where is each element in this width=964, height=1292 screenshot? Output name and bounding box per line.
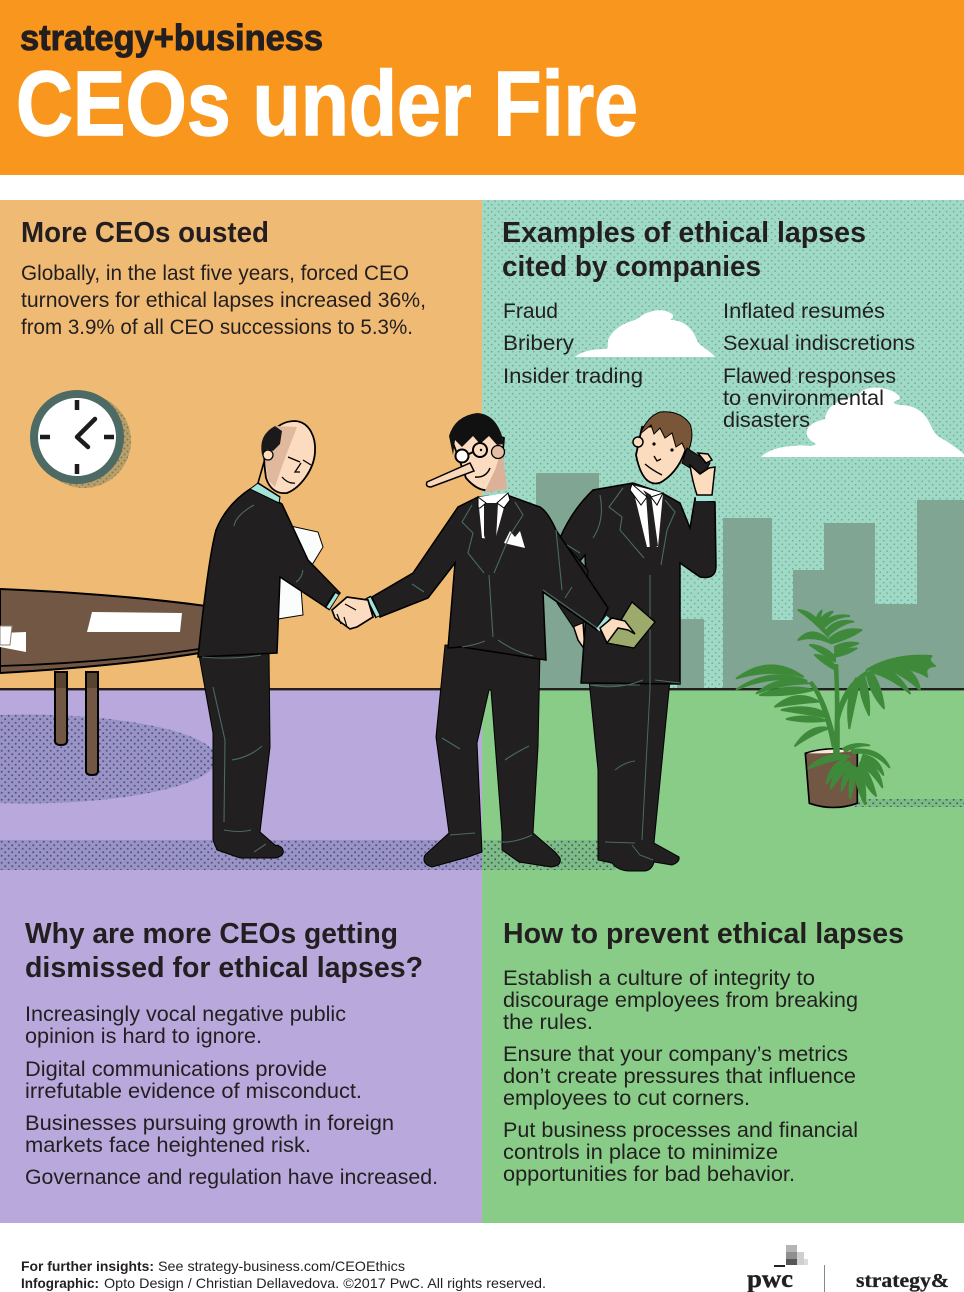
header banner <box>0 0 964 175</box>
jacket <box>198 489 340 657</box>
body text: turnovers for ethical lapses increased 36%, <box>21 289 426 312</box>
face <box>282 457 311 483</box>
seams <box>202 505 303 852</box>
list right: Sexual indiscretions <box>723 332 915 355</box>
ear <box>263 450 273 460</box>
heading: How to prevent ethical lapses <box>503 918 904 950</box>
list right: Inflated resumés <box>723 300 885 323</box>
list right: to environmental <box>723 387 884 410</box>
reasons list: irrefutable evidence of misconduct. <box>25 1080 362 1103</box>
heading: Why are more CEOs getting <box>25 918 398 950</box>
handshake <box>332 597 373 629</box>
floor shadow strip <box>0 840 616 870</box>
glasses <box>456 443 487 462</box>
potted plant <box>737 610 935 807</box>
reasons list: Increasingly vocal negative public <box>25 1003 346 1026</box>
head <box>264 421 315 493</box>
prevention list: Put business processes and financial <box>503 1119 858 1142</box>
heading: cited by companies <box>502 251 761 283</box>
cuffs <box>368 597 378 617</box>
stems and leaves <box>737 610 935 804</box>
reasons list: Digital communications provide <box>25 1058 327 1081</box>
clock ticks and hands <box>40 400 114 474</box>
list right: Flawed responses <box>723 365 896 388</box>
body text <box>21 262 426 339</box>
cuff <box>327 593 337 609</box>
panel backgrounds <box>0 200 964 1223</box>
shirt and tie <box>478 493 508 540</box>
heading <box>502 217 866 283</box>
footer credits: See strategy-business.com/CEOEthics <box>158 1258 405 1274</box>
heading <box>25 918 423 984</box>
footer credits <box>21 1258 546 1291</box>
footer credits: Opto Design / Christian Dellavedova. ©2017 PwC. All rights reserved. <box>104 1275 546 1291</box>
logo: strategy&: strategy& <box>856 1270 949 1292</box>
footer credits: For further insights: <box>21 1258 154 1274</box>
left arm <box>557 538 588 627</box>
prevention list: employees to cut corners. <box>503 1087 750 1110</box>
shirt <box>632 485 663 547</box>
trouser lines <box>590 685 653 860</box>
list right: disasters <box>723 409 810 432</box>
list left: Insider trading <box>503 365 643 388</box>
hair <box>261 426 282 455</box>
pot <box>805 749 857 807</box>
logo divider <box>824 1265 825 1292</box>
panel: examples of ethical lapses <box>502 217 915 432</box>
panel: more CEOs ousted <box>21 217 426 339</box>
list left: Bribery <box>503 332 575 355</box>
table legs <box>55 672 98 775</box>
heading: dismissed for ethical lapses? <box>25 952 423 984</box>
panel: why dismissed <box>25 918 438 1189</box>
lapels and seams <box>412 502 600 842</box>
prevention list: opportunities for bad behavior. <box>503 1163 795 1186</box>
jacket lines <box>567 488 680 690</box>
heading: Examples of ethical lapses <box>502 217 866 249</box>
hair <box>449 413 504 455</box>
hand in pocket <box>573 622 585 650</box>
prevention list: controls in place to minimize <box>503 1141 778 1164</box>
prevention list <box>503 967 858 1186</box>
skyline <box>536 473 964 689</box>
jacket <box>560 483 716 684</box>
logo: pwc <box>747 1245 808 1292</box>
long nose <box>426 463 474 487</box>
prevention list: Ensure that your company’s metrics <box>503 1043 848 1066</box>
title: CEOs under Fire <box>16 53 638 155</box>
phone <box>682 448 710 476</box>
body text: Globally, in the last five years, forced CEO <box>21 262 409 285</box>
list left: Fraud <box>503 300 558 323</box>
legs and shoes <box>424 645 560 867</box>
trousers and shoe <box>199 650 283 858</box>
cloud left <box>575 310 715 357</box>
pwc mark <box>774 1245 808 1267</box>
money <box>607 602 655 648</box>
trousers <box>589 680 679 871</box>
prevention list: discourage employees from breaking <box>503 989 858 1012</box>
person: left balding executive <box>198 421 373 858</box>
person: right colleague on phone <box>557 412 716 871</box>
papers on table <box>0 612 182 652</box>
papers <box>278 525 323 619</box>
body text: from 3.9% of all CEO successions to 5.3%. <box>21 316 413 339</box>
prevention list: the rules. <box>503 1011 593 1034</box>
hair <box>640 412 692 454</box>
panel: how to prevent <box>503 918 904 1186</box>
table shadow <box>0 714 217 804</box>
prevention list: don’t create pressures that influence <box>503 1065 856 1088</box>
cloud right <box>761 388 964 457</box>
head <box>636 425 687 484</box>
reasons list: Governance and regulation have increased. <box>25 1166 438 1189</box>
table <box>0 589 206 775</box>
reasons list: markets face heightened risk. <box>25 1134 311 1157</box>
list left <box>503 300 643 388</box>
collar <box>250 483 280 503</box>
mouth <box>475 468 490 477</box>
jacket <box>372 495 608 660</box>
heading: More CEOs ousted <box>21 217 269 249</box>
person: center CEO with long nose <box>368 413 635 867</box>
phone hand <box>690 453 715 495</box>
reasons list: Businesses pursuing growth in foreign <box>25 1112 394 1135</box>
hand on money <box>600 618 635 643</box>
prevention list: Establish a culture of integrity to <box>503 967 815 990</box>
list right <box>723 300 915 432</box>
publication name: strategy+business <box>20 17 323 58</box>
pocket square <box>504 531 525 548</box>
floor line <box>0 688 964 690</box>
wall clock <box>34 394 131 488</box>
reasons list <box>25 1003 438 1189</box>
footer credits: Infographic: <box>21 1275 99 1291</box>
head <box>452 425 504 490</box>
neck <box>258 462 280 497</box>
plant shadow strip <box>855 799 964 807</box>
reasons list: opinion is hard to ignore. <box>25 1025 262 1048</box>
face <box>645 456 662 475</box>
